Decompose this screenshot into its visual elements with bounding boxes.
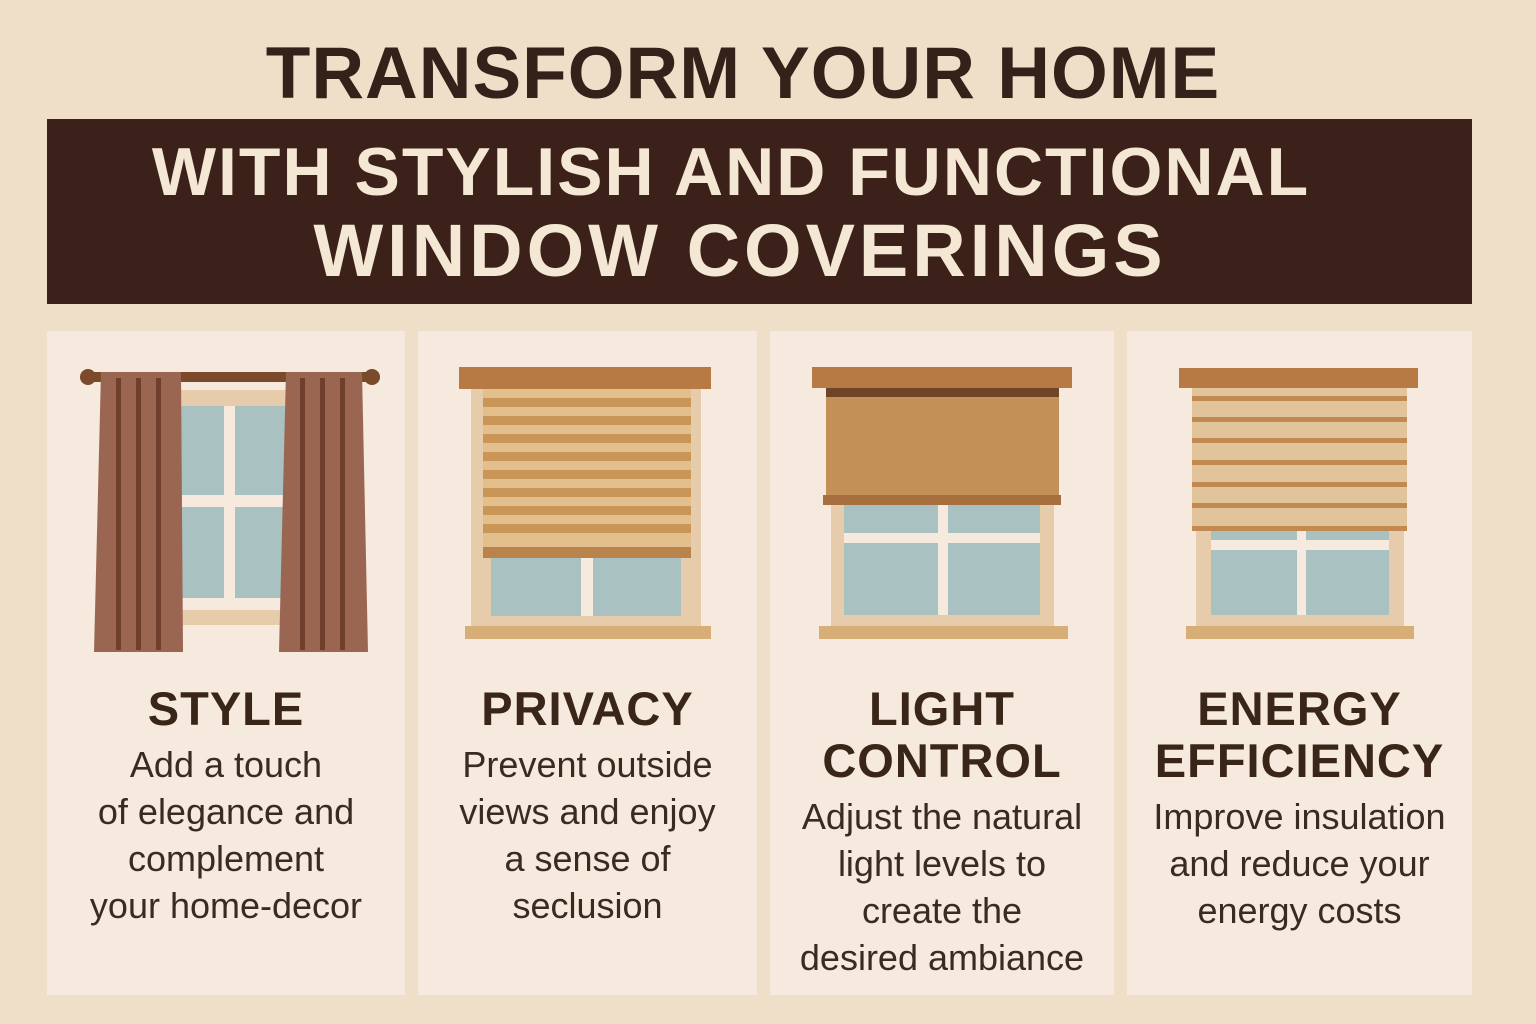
heading: energy efficiency: ENERGY [1197,682,1402,735]
heading: energy efficiency [1155,682,1444,787]
panel: energy efficiency [1127,331,1472,995]
text: energy efficiency: and reduce your [1169,843,1430,884]
text: light control: create the [862,890,1022,931]
banner: WITH STYLISH AND FUNCTIONAL [152,134,1310,210]
text: privacy: a sense of [504,838,671,879]
text: energy efficiency: Improve insulation [1153,796,1446,837]
text: style [90,744,362,926]
heading: light control [822,682,1062,787]
heading: light control: LIGHT [869,682,1015,735]
icon: roller shade [812,367,1072,639]
panel: privacy [418,331,757,995]
panel: light control [770,331,1114,995]
title: TRANSFORM YOUR HOME [266,33,1220,114]
panel: style [47,331,405,995]
heading: light control: CONTROL [822,734,1062,787]
text: energy efficiency: energy costs [1197,890,1402,931]
text: privacy: seclusion [512,885,663,926]
text: energy efficiency [1153,796,1446,931]
text: light control: Adjust the natural [802,796,1082,837]
icon: cellular shade [1179,368,1418,639]
heading: privacy: PRIVACY [481,682,694,735]
banner [47,119,1472,304]
heading: style: STYLE [148,682,304,735]
text: light control: desired ambiance [800,937,1084,978]
text: privacy [459,744,716,926]
icon: curtains [80,369,380,652]
text: style: of elegance and [98,791,354,832]
banner: WINDOW COVERINGS [313,209,1167,292]
text: style: complement [128,838,324,879]
text: privacy: Prevent outside [462,744,713,785]
text: style: your home-decor [90,885,362,926]
text: light control [800,796,1084,978]
heading: energy efficiency: EFFICIENCY [1155,734,1444,787]
text: style: Add a touch [130,744,322,785]
text: light control: light levels to [838,843,1046,884]
icon: privacy blinds [459,367,711,639]
text: privacy: views and enjoy [459,791,716,832]
